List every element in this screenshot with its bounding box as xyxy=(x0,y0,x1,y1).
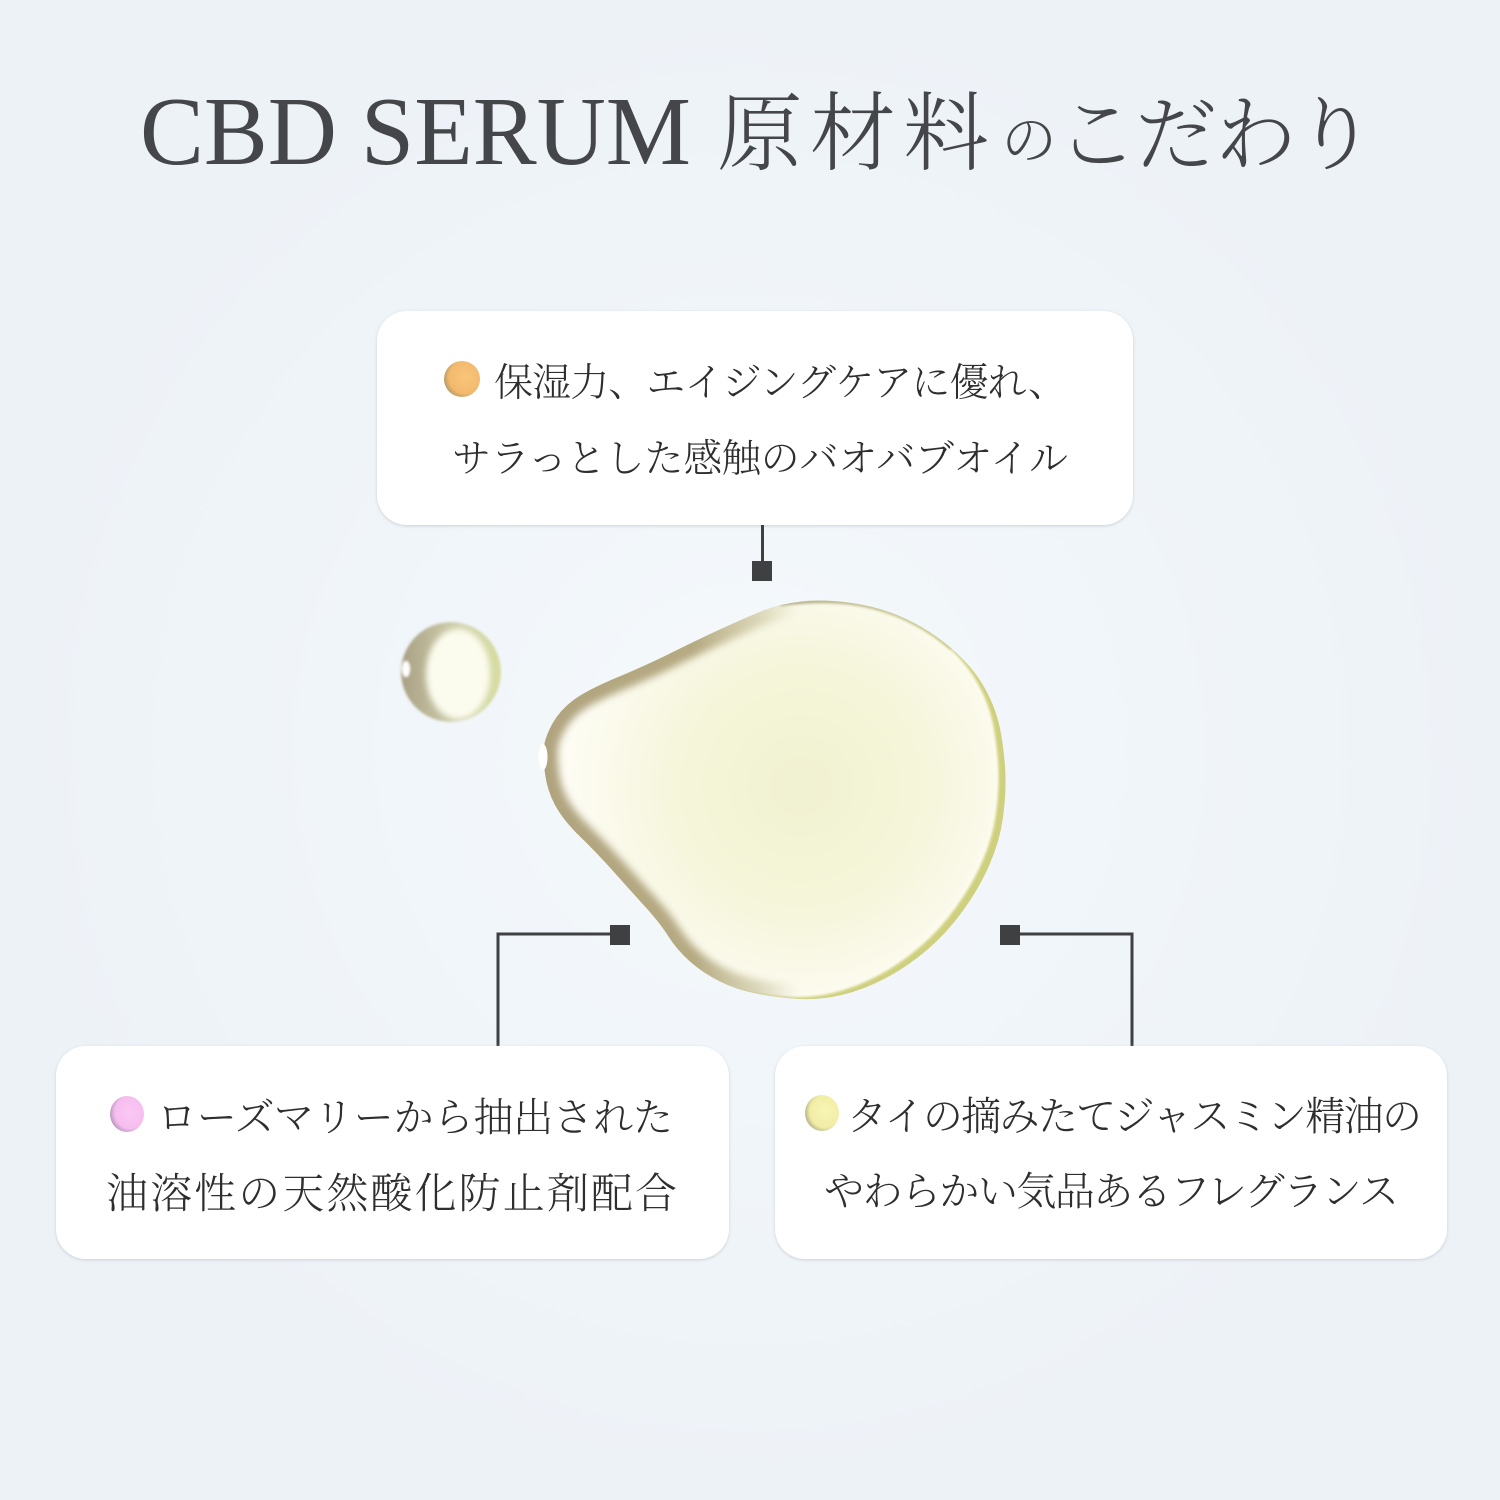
icon: pink bullet xyxy=(110,1096,144,1132)
text: bottom left callout xyxy=(106,1095,677,1218)
icon: orange bullet xyxy=(444,361,480,397)
text: top callout xyxy=(452,362,1068,481)
title: 原材料 xyxy=(717,86,989,182)
text: top callout: サラっとした感触のバオバブオイル xyxy=(452,438,1068,481)
text: top callout: 保湿力、エイジングケアに優れ、 xyxy=(494,362,1067,405)
icon: yellow bullet xyxy=(805,1095,839,1131)
title: CBD SERUM xyxy=(140,78,691,186)
title: こだわり xyxy=(1056,90,1376,181)
text: bottom left callout: ローズマリーから抽出された xyxy=(157,1095,673,1140)
callout: bottom right xyxy=(775,1046,1447,1259)
text: bottom right callout xyxy=(824,1094,1422,1214)
title: の xyxy=(1001,111,1057,173)
callout: top xyxy=(377,311,1133,525)
text: bottom right callout: やわらかい気品あるフレグランス xyxy=(824,1169,1399,1214)
connector: top xyxy=(752,525,772,581)
oil drop: small xyxy=(401,622,501,722)
connector: right xyxy=(1000,925,1132,1046)
connector: left xyxy=(498,925,630,1046)
text: bottom right callout: タイの摘みたてジャスミン精油の xyxy=(847,1094,1422,1139)
callout: bottom left xyxy=(56,1046,729,1259)
title xyxy=(140,78,1376,186)
oil drop: large xyxy=(530,590,1020,1010)
text: bottom left callout: 油溶性の天然酸化防止剤配合 xyxy=(106,1172,677,1218)
